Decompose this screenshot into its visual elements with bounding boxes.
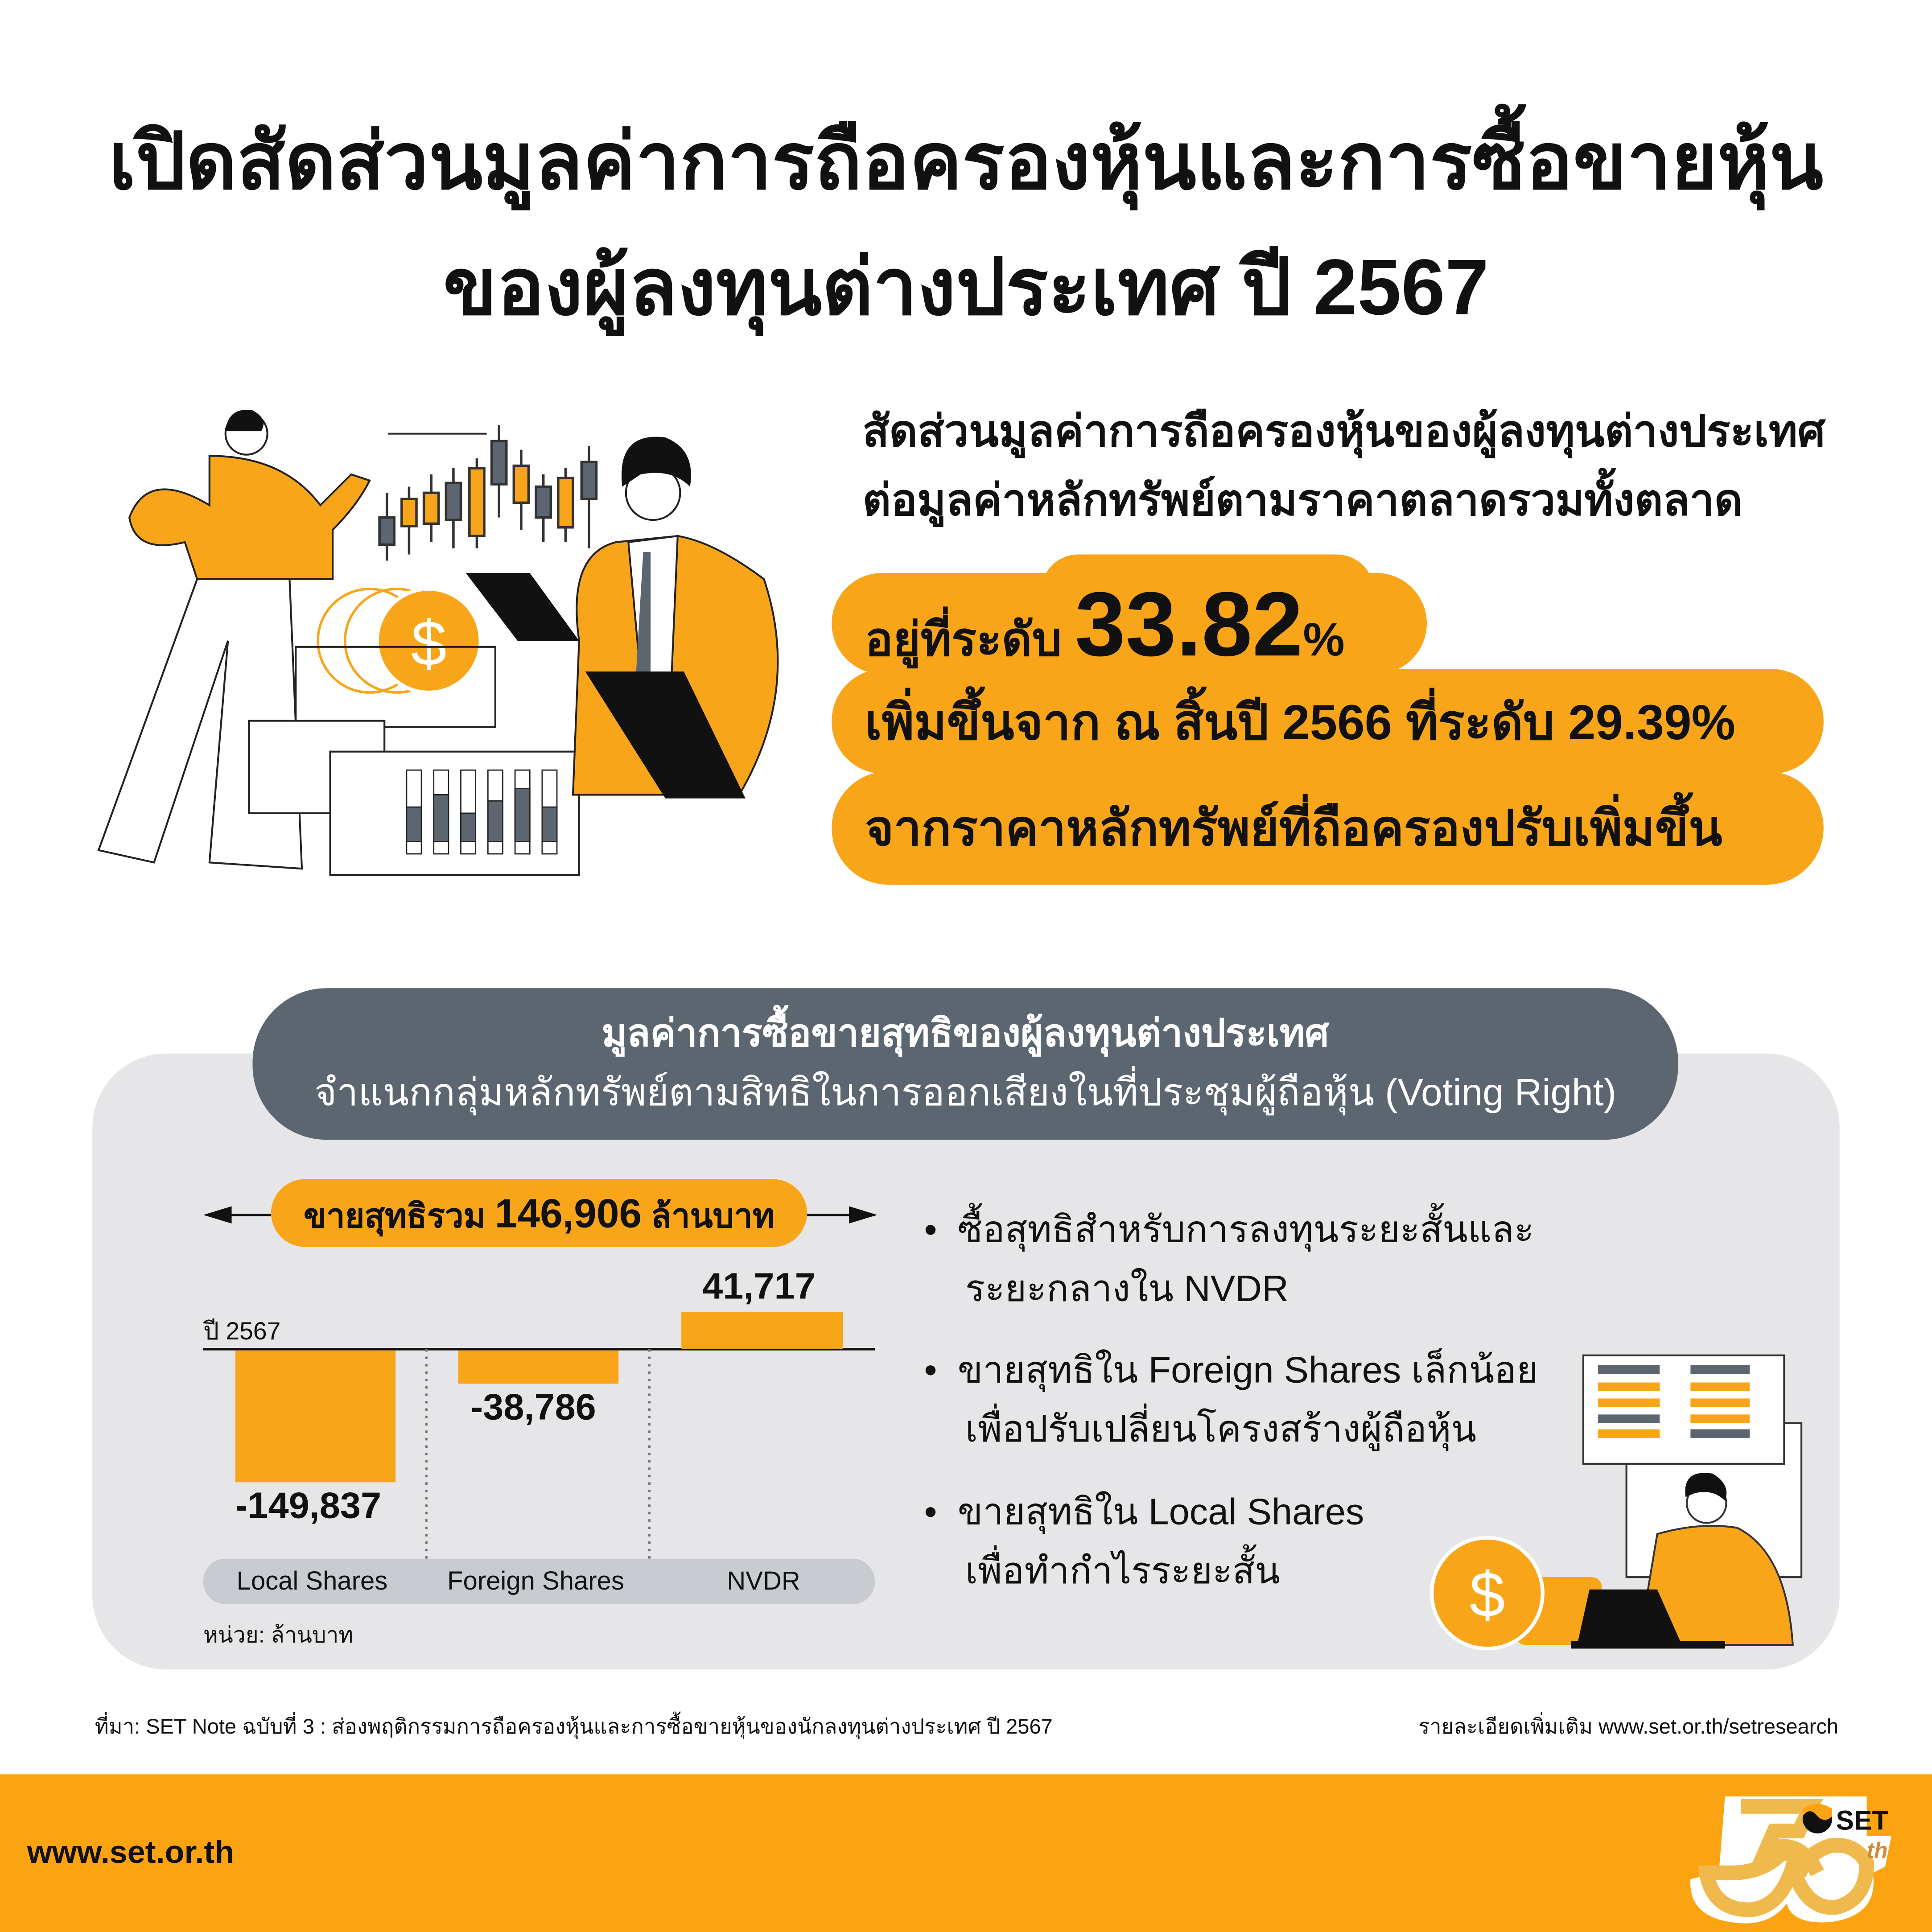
subheading: holding ratio: ต่อมูลค่าหลักทรัพย์ตามราคาตลาดรวมทั้งตลาด [862, 476, 1743, 525]
text: • ขายสุทธิใน Foreign Shares เล็กน้อย [924, 1351, 1538, 1391]
website: www.set.or.th [27, 1833, 234, 1870]
highlight pills [825, 552, 1830, 887]
total pill: ขายสุทธิรวม 146,906 ล้านบาท [304, 1190, 774, 1236]
more info link: รายละเอียดเพิ่มเติม www.set.or.th/setresearch [1418, 1715, 1838, 1738]
bar chart: -38,786 [471, 1388, 596, 1428]
reason text: จากราคาหลักทรัพย์ที่ถือครองปรับเพิ่มขึ้น [865, 802, 1722, 857]
illustration: trader with laptop [1423, 1349, 1805, 1657]
prior year text: เพิ่มขึ้นจาก ณ สิ้นปี 2566 ที่ระดับ 29.39% [865, 696, 1735, 750]
level value: อยู่ที่ระดับ 33.82% [865, 573, 1345, 675]
category axis: NVDR [727, 1567, 800, 1596]
panel header: จำแนกกลุ่มหลักทรัพย์ตามสิทธิในการออกเสียงในที่ประชุมผู้ถือหุ้น (Voting Right) [314, 1071, 1616, 1114]
text: • ซื้อสุทธิสำหรับการลงทุนระยะสั้นและ [924, 1210, 1534, 1251]
total pill [271, 1179, 807, 1247]
category axis: Local Shares [237, 1567, 387, 1596]
source note: ที่มา: SET Note ฉบับที่ 3 : ส่องพฤติกรรมการถือครองหุ้นและการซื้อขายหุ้นของนักลงทุนต่างประเทศ ปี 2567 [95, 1715, 1053, 1738]
footer band [0, 1774, 1932, 1932]
illustration: analysts with chart [86, 400, 813, 887]
logo: SET 50th: th [1867, 1838, 1887, 1863]
bar chart: -149,837 [235, 1486, 381, 1527]
panel header: มูลค่าการซื้อขายสุทธิของผู้ลงทุนต่างประเทศ [601, 1012, 1329, 1055]
panel: net trading [92, 1054, 1840, 1669]
bar chart: หน่วย: ล้านบาท [203, 1623, 353, 1648]
category axis [203, 1559, 875, 1604]
bar chart: 41,717 [702, 1267, 816, 1307]
bar chart [197, 1170, 887, 1651]
subheading: holding ratio [862, 397, 1825, 535]
subheading: holding ratio: สัดส่วนมูลค่าการถือครองหุ้นของผู้ลงทุนต่างประเทศ [862, 407, 1825, 456]
logo: SET 50th: SET [1836, 1805, 1889, 1836]
illustration: trader with laptop: $ [1469, 1559, 1505, 1631]
bar chart: ปี 2567 [203, 1318, 280, 1346]
title: เปิดสัดส่วนมูลค่าการถือครองหุ้นและการซื้อขายหุ้น [109, 117, 1823, 206]
category axis: Foreign Shares [447, 1567, 624, 1596]
logo: SET 50th [1682, 1787, 1903, 1928]
illustration: analysts with chart: $ [411, 608, 447, 679]
title [0, 99, 1932, 350]
bullet list [924, 1201, 925, 1202]
text: ระยะกลางใน NVDR [965, 1269, 1289, 1310]
panel header [252, 988, 1678, 1140]
title: ของผู้ลงทุนต่างประเทศ ปี 2567 [443, 243, 1489, 331]
text: เพื่อปรับเปลี่ยนโครงสร้างผู้ถือหุ้น [965, 1409, 1476, 1450]
text: เพื่อทำกำไรระยะสั้น [965, 1551, 1280, 1592]
text: • ขายสุทธิใน Local Shares [924, 1492, 1364, 1533]
